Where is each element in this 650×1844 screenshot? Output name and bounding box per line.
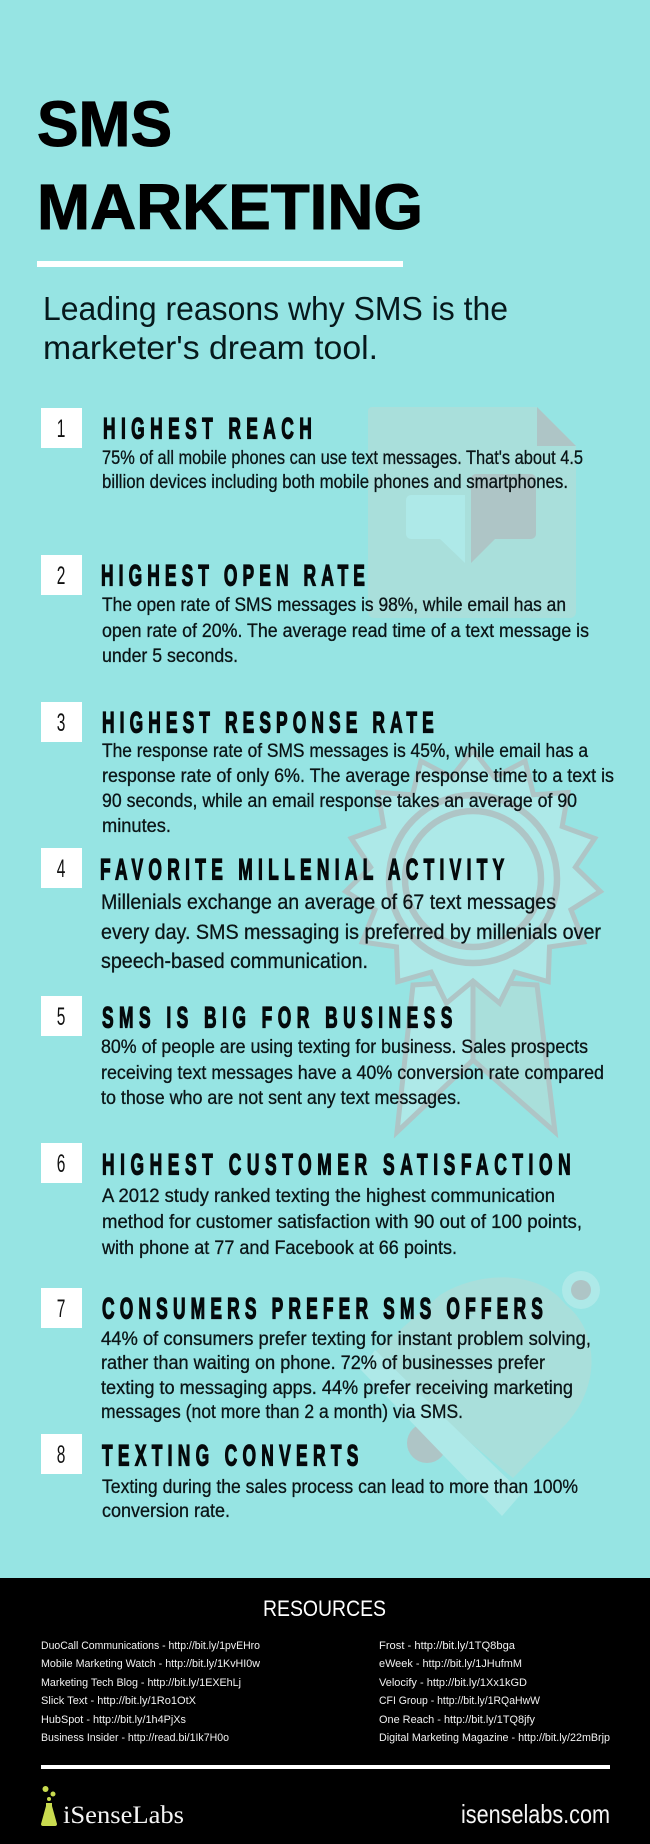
resources list right: Digital Marketing Magazine - http://bit.ly/22mBrjp [379, 1732, 610, 1744]
panel: reason 5 [41, 996, 604, 1109]
title [37, 88, 423, 243]
number box 7: 7 [57, 1295, 65, 1323]
title: MARKETING [37, 171, 423, 243]
resources list left: DuoCall Communications - http://bit.ly/1pvEHro [41, 1640, 260, 1652]
body 2: open rate of 20%. The average read time of a text message is [102, 620, 589, 642]
panel: reason 2 [41, 555, 589, 667]
title underline [37, 261, 403, 267]
body 6 [101, 1185, 582, 1259]
body 8: conversion rate. [102, 1500, 230, 1522]
panel: reason 4 [41, 848, 601, 973]
resources list right: Velocify - http://bit.ly/1Xx1kGD [379, 1677, 527, 1689]
body 8 [102, 1476, 578, 1522]
body 6: A 2012 study ranked texting the highest communication [102, 1185, 555, 1207]
number box 7 [41, 1288, 82, 1328]
icon: document with chat bubbles [368, 407, 576, 618]
body 1: billion devices including both mobile phones and smartphones. [102, 471, 568, 493]
resources list right [379, 1640, 610, 1744]
heading 8: TEXTING CONVERTS [102, 1440, 358, 1473]
number box 6 [41, 1143, 82, 1183]
panel: reason 6 [41, 1143, 582, 1259]
icon: map pin [361, 1271, 600, 1516]
resources list left: Slick Text - http://bit.ly/1Ro1OtX [41, 1695, 197, 1707]
number box 4: 4 [57, 855, 65, 883]
body 3: The response rate of SMS messages is 45%, while email has a [102, 740, 588, 762]
resources list left [41, 1640, 260, 1744]
body 1 [102, 447, 583, 493]
panel: reason 7 [41, 1288, 591, 1423]
logo wordmark: iSenseLabs [63, 1802, 184, 1829]
subtitle: Leading reasons why SMS is the [43, 290, 508, 327]
heading 7: CONSUMERS PREFER SMS OFFERS [102, 1293, 543, 1326]
heading 4: FAVORITE MILLENIAL ACTIVITY [100, 854, 504, 887]
number box 2 [41, 555, 82, 595]
logo: flask icon [41, 1786, 57, 1826]
icon: award rosette badge [346, 750, 600, 1132]
number box 5: 5 [57, 1003, 65, 1031]
body 6: with phone at 77 and Facebook at 66 points. [101, 1237, 457, 1259]
resources list right: eWeek - http://bit.ly/1JHufmM [379, 1658, 522, 1670]
resources heading: RESOURCES [263, 1596, 386, 1621]
body 4: speech-based communication. [101, 949, 368, 973]
resources list right: CFI Group - http://bit.ly/1RQaHwW [379, 1695, 541, 1707]
heading 6: HIGHEST CUSTOMER SATISFACTION [102, 1149, 571, 1182]
body 8: Texting during the sales process can lead to more than 100% [102, 1476, 578, 1498]
body 7: messages (not more than 2 a month) via SMS. [101, 1401, 463, 1423]
resources list right: Frost - http://bit.ly/1TQ8bga [379, 1640, 516, 1652]
body 7: rather than waiting on phone. 72% of businesses prefer [101, 1352, 545, 1374]
body 5: receiving text messages have a 40% conversion rate compared [101, 1062, 604, 1084]
number box 5 [41, 996, 82, 1036]
resources list left: Mobile Marketing Watch - http://bit.ly/1KvHI0w [41, 1658, 260, 1670]
body 3 [102, 740, 614, 837]
panel: footer [0, 1578, 650, 1844]
number box 3 [41, 702, 82, 742]
body 4: Millenials exchange an average of 67 text messages [101, 890, 556, 914]
subtitle: marketer's dream tool. [43, 329, 378, 366]
number box 2: 2 [57, 562, 65, 590]
number box 4 [41, 848, 82, 888]
body 4 [101, 890, 601, 973]
body 7 [101, 1328, 591, 1423]
body 5: 80% of people are using texting for business. Sales prospects [101, 1036, 588, 1058]
body 3: minutes. [102, 815, 171, 837]
resources list right: One Reach - http://bit.ly/1TQ8jfy [379, 1714, 535, 1726]
heading 5: SMS IS BIG FOR BUSINESS [102, 1002, 452, 1035]
number box 1: 1 [57, 415, 65, 443]
heading 3: HIGHEST RESPONSE RATE [102, 707, 434, 740]
heading 1: HIGHEST REACH [103, 413, 312, 446]
resources list left: Business Insider - http://read.bi/1Ik7H0o [41, 1732, 229, 1744]
body 7: texting to messaging apps. 44% prefer receiving marketing [101, 1377, 573, 1399]
body 3: 90 seconds, while an email response takes an average of 90 [102, 790, 577, 812]
body 5: to those who are not sent any text messages. [101, 1087, 461, 1109]
panel: reason 3 [41, 702, 614, 837]
number box 8 [41, 1434, 82, 1474]
number box 1 [41, 408, 82, 448]
panel: reason 1 [41, 408, 583, 493]
body 3: response rate of only 6%. The average response time to a text is [102, 765, 614, 787]
body 2: under 5 seconds. [102, 645, 238, 667]
resources list left: Marketing Tech Blog - http://bit.ly/1EXEhLj [41, 1677, 241, 1689]
body 2: The open rate of SMS messages is 98%, while email has an [102, 594, 566, 616]
resources list left: HubSpot - http://bit.ly/1h4PjXs [41, 1714, 186, 1726]
heading 2: HIGHEST OPEN RATE [101, 560, 365, 593]
body 2 [102, 594, 589, 667]
body 4: every day. SMS messaging is preferred by millenials over [101, 920, 601, 944]
number box 3: 3 [57, 709, 65, 737]
number box 6: 6 [57, 1150, 65, 1178]
title: SMS [37, 88, 172, 160]
subtitle [43, 290, 508, 366]
body 7: 44% of consumers prefer texting for instant problem solving, [101, 1328, 591, 1350]
website url: isenselabs.com [461, 1799, 610, 1829]
body 5 [101, 1036, 604, 1109]
number box 8: 8 [57, 1441, 65, 1469]
body 6: method for customer satisfaction with 90 out of 100 points, [102, 1211, 582, 1233]
panel: reason 8 [41, 1434, 578, 1522]
